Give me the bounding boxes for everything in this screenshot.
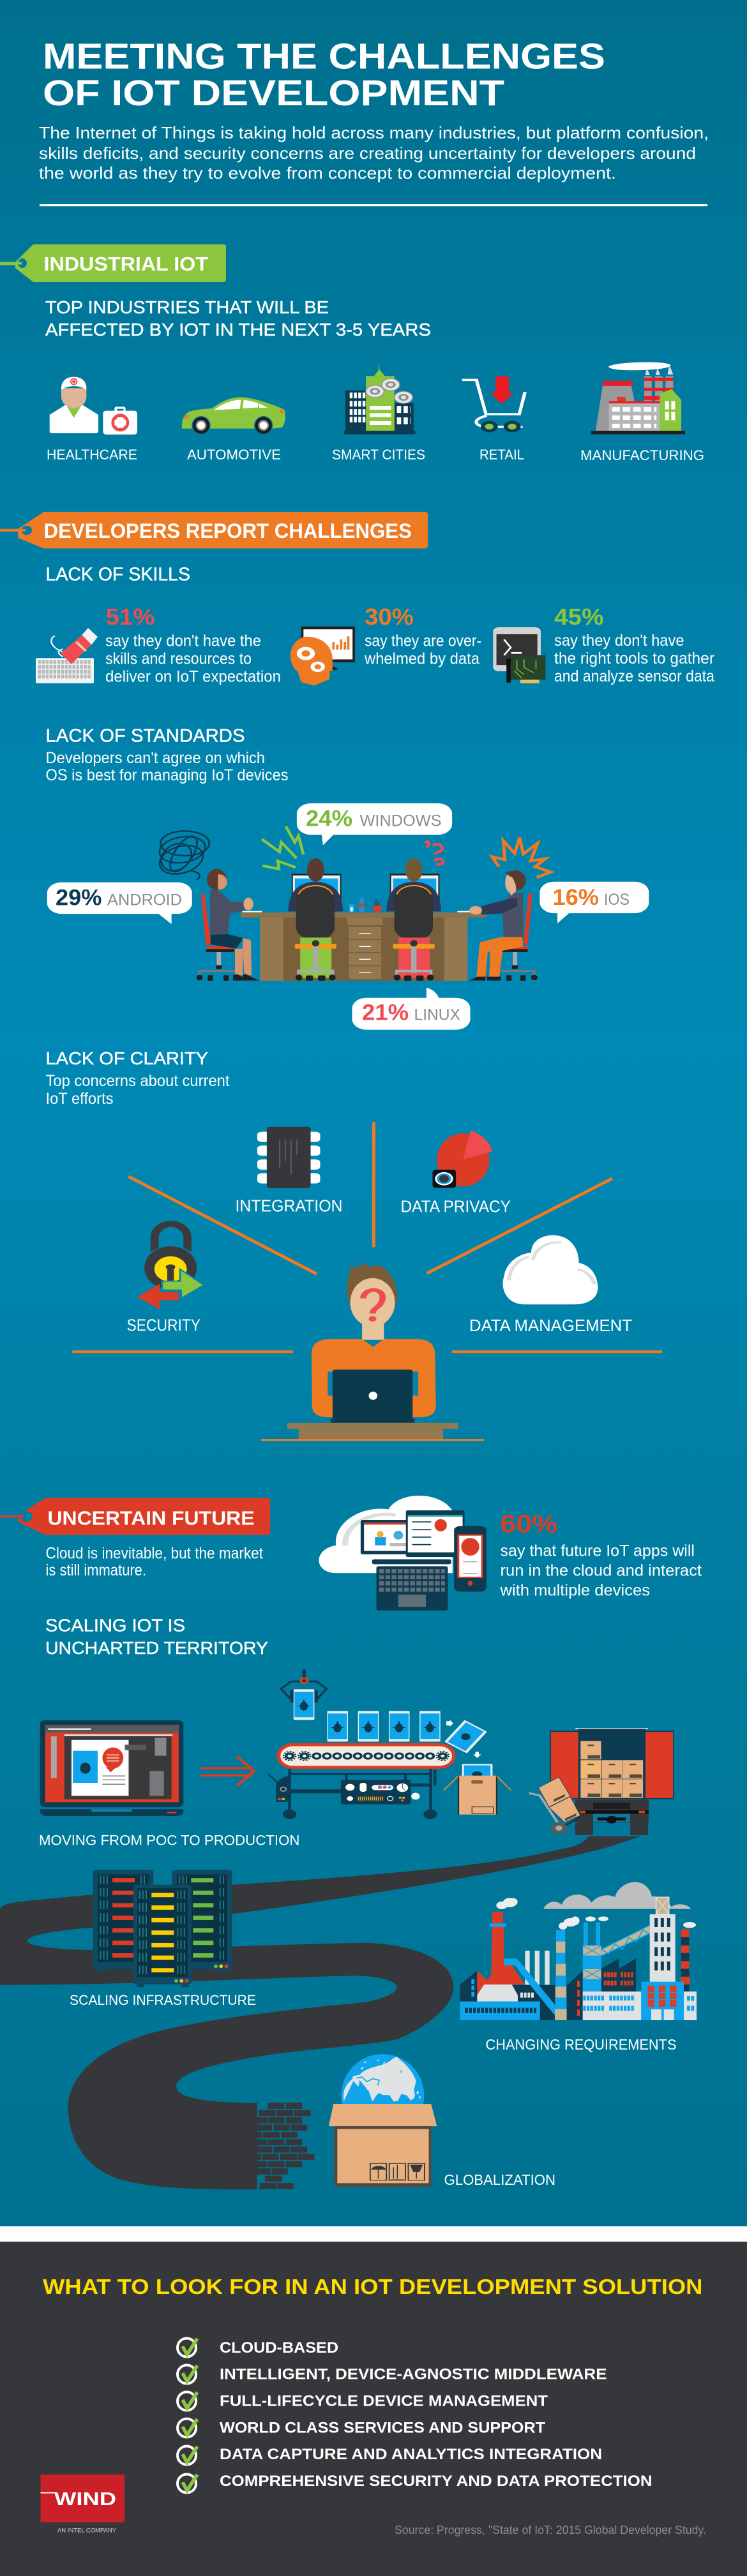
- callout: ios 16 percent: IOS: [604, 891, 630, 909]
- callout: android 29 percent: [47, 882, 192, 924]
- stat: 51 percent: say they don't have the: [105, 632, 261, 650]
- checklist: [177, 2338, 653, 2492]
- icon: integration chip: [257, 1127, 320, 1188]
- callout: ios 16 percent: [540, 882, 649, 923]
- icon: security lock: [137, 1221, 204, 1309]
- stat: 45 percent: say they don't have: [554, 632, 684, 650]
- callout: linux 21 percent: 21%: [362, 1001, 409, 1025]
- label: data privacy: DATA PRIVACY: [401, 1198, 511, 1216]
- text: lack of standards: Developers can't agree on which: [46, 749, 265, 767]
- stat: 45 percent: 45%: [554, 604, 604, 630]
- stat: 30 percent: 30%: [365, 604, 414, 630]
- label: globalization: GLOBALIZATION: [444, 2171, 555, 2188]
- heading: scaling iot: [45, 1616, 268, 1658]
- heading: what to look for: WHAT TO LOOK FOR IN AN IOT DEVELOPMENT SOLUTION: [43, 2275, 702, 2298]
- illustration: developers at desk: [155, 826, 550, 981]
- question marks: [425, 842, 443, 865]
- labels: industries: AUTOMOTIVE: [187, 447, 281, 463]
- winding road: [0, 1836, 641, 2189]
- intro text: The Internet of Things is taking hold across many industries, but platform confusion,: [39, 123, 709, 142]
- icon: poc laptop: [40, 1720, 183, 1816]
- heading: top industries: AFFECTED BY IOT IN THE NEXT 3-5 YEARS: [45, 320, 431, 339]
- heading: scaling iot: UNCHARTED TERRITORY: [45, 1638, 268, 1658]
- tag: industrial iot: [0, 244, 226, 282]
- stat: 30 percent: whelmed by data: [364, 650, 479, 667]
- check item: cloud-based: CLOUD-BASED: [220, 2339, 338, 2356]
- burst: [492, 838, 550, 877]
- icon: head with gears and chart: [290, 627, 355, 686]
- illustration: confused developer: [261, 1262, 484, 1441]
- callout: android 29 percent: 29%: [56, 886, 102, 910]
- text: cloud is inevitable: is still immature.: [46, 1561, 146, 1579]
- heading: scaling iot: SCALING IOT IS: [45, 1616, 185, 1635]
- icon: healthcare: [50, 377, 137, 435]
- logo: wind: [41, 2475, 124, 2534]
- label: changing requirements: CHANGING REQUIREMENTS: [485, 2036, 677, 2053]
- check item: analytics: DATA CAPTURE AND ANALYTICS INTEGRATION: [220, 2446, 602, 2463]
- truck: [550, 1728, 674, 1835]
- text: lack of standards: [46, 749, 289, 784]
- machine frame: [268, 1769, 437, 1819]
- labels: industries: MANUFACTURING: [580, 447, 704, 463]
- illustration: factory: [460, 1882, 697, 2020]
- text: cloud is inevitable: [46, 1544, 263, 1579]
- text: lack of clarity: [46, 1072, 230, 1108]
- panel: industrial iot: [0, 244, 704, 463]
- label: integration: INTEGRATION: [235, 1197, 342, 1215]
- person: windows developer: [288, 858, 343, 981]
- stat: 45 percent: and analyze sensor data: [554, 667, 714, 685]
- callout: windows 24 percent: 24%: [306, 807, 352, 831]
- icon: manufacturing: [591, 362, 685, 434]
- panel: what to look for: [0, 2242, 747, 2576]
- tag: developers report challenges: [0, 512, 428, 549]
- source note: Source: Progress, "State of IoT: 2015 Global Developer Study.: [395, 2524, 706, 2536]
- callout: android 29 percent: ANDROID: [107, 891, 182, 909]
- conveyor belt: [276, 1743, 455, 1769]
- intro text: [39, 123, 709, 182]
- title: OF IOT DEVELOPMENT: [43, 73, 504, 114]
- title: MEETING THE CHALLENGES: [43, 36, 605, 77]
- stat: 30 percent: [364, 604, 481, 667]
- heading: lack of skills: LACK OF SKILLS: [46, 564, 190, 584]
- panel: developers report challenges: [0, 512, 714, 1441]
- intro text: skills deficits, and security concerns are creating uncertainty for developers around: [39, 144, 696, 163]
- callout: windows 24 percent: WINDOWS: [360, 812, 442, 830]
- person: linux developer: [386, 858, 441, 981]
- icon: automotive: [182, 397, 285, 435]
- labels: industries: [47, 447, 704, 463]
- stat: 51 percent: deliver on IoT expectation: [105, 667, 281, 685]
- scribble: [155, 831, 209, 879]
- icon: globe in box: [329, 2054, 437, 2187]
- stat: 60 percent: say that future IoT apps will: [501, 1542, 695, 1560]
- title: [43, 36, 605, 114]
- tag text: UNCERTAIN FUTURE: [47, 1507, 254, 1529]
- person: ios developer: [469, 870, 538, 981]
- illustration: conveyor line: [268, 1670, 674, 1835]
- icon: smart cities: [344, 361, 416, 434]
- icon: data privacy pie: [433, 1130, 492, 1188]
- stat: 60 percent: 60%: [501, 1510, 557, 1538]
- callout: ios 16 percent: 16%: [553, 885, 599, 910]
- stat: 45 percent: [554, 604, 714, 685]
- white band: [0, 2226, 747, 2242]
- heading: top industries: [45, 297, 431, 339]
- stat: 30 percent: say they are over-: [365, 632, 481, 650]
- text: lack of clarity: IoT efforts: [46, 1090, 114, 1108]
- label: data management: DATA MANAGEMENT: [469, 1317, 632, 1335]
- tablets on belt: [327, 1711, 487, 1758]
- tag text: DEVELOPERS REPORT CHALLENGES: [43, 519, 412, 542]
- stat: 60 percent: run in the cloud and interact: [501, 1562, 702, 1580]
- check item: security: COMPREHENSIVE SECURITY AND DATA PROTECTION: [220, 2473, 653, 2490]
- stat: 51 percent: skills and resources to: [105, 650, 252, 667]
- person: android developer: [197, 869, 259, 981]
- icon: data management cloud: [503, 1235, 598, 1304]
- callout: linux 21 percent: [352, 988, 470, 1030]
- tag: industrial iot: INDUSTRIAL IOT: [43, 253, 208, 275]
- tag: uncertain future: [0, 1498, 270, 1535]
- arrow: poc to production: [200, 1756, 254, 1786]
- icon: terminal and circuit board: [493, 627, 545, 683]
- icon: server racks: [93, 1870, 232, 1987]
- stat: 60 percent: with multiple devices: [499, 1581, 650, 1599]
- icon: usb and keyboard: [36, 628, 98, 683]
- intro text: the world as they try to evolve from concept to commercial deployment.: [39, 163, 616, 182]
- lightning bolts: [262, 826, 303, 869]
- check item: cloud-based: [177, 2338, 338, 2357]
- robot arm: [281, 1670, 327, 1720]
- desk: [241, 911, 486, 981]
- stat: 45 percent: the right tools to gather: [554, 650, 714, 667]
- callout: windows 24 percent: [297, 803, 452, 845]
- label: scaling infrastructure: SCALING INFRASTRUCTURE: [70, 1992, 256, 2008]
- stat: 51 percent: [105, 604, 281, 685]
- check item: middleware: INTELLIGENT, DEVICE-AGNOSTIC MIDDLEWARE: [220, 2366, 607, 2383]
- packing box: [444, 1764, 511, 1815]
- labels: industries: SMART CITIES: [332, 447, 425, 463]
- logo: wind: AN INTEL COMPANY: [57, 2527, 117, 2534]
- radiating lines: [72, 1122, 662, 1351]
- stat: 60 percent: [499, 1510, 702, 1599]
- control panel: [345, 1783, 420, 1801]
- text: lack of standards: OS is best for managing IoT devices: [46, 766, 289, 784]
- callout: linux 21 percent: LINUX: [414, 1006, 460, 1024]
- heading: lack of standards: LACK OF STANDARDS: [46, 726, 245, 747]
- heading: lack of clarity: LACK OF CLARITY: [46, 1048, 208, 1068]
- icon: retail: [462, 376, 525, 432]
- desk items: [349, 897, 382, 912]
- text: cloud is inevitable: Cloud is inevitable, but the market: [46, 1544, 263, 1562]
- check item: device management: FULL-LIFECYCLE DEVICE MANAGEMENT: [220, 2393, 548, 2409]
- heading: top industries: TOP INDUSTRIES THAT WILL BE: [45, 297, 329, 317]
- label: security: SECURITY: [126, 1317, 200, 1335]
- check item: services and support: WORLD CLASS SERVICES AND SUPPORT: [220, 2420, 545, 2436]
- labels: industries: RETAIL: [479, 447, 524, 463]
- text: lack of clarity: Top concerns about current: [46, 1072, 230, 1090]
- icon: brick wall: [253, 2103, 314, 2189]
- labels: industries: HEALTHCARE: [47, 447, 137, 463]
- logo: wind: WIND: [54, 2489, 116, 2510]
- stat: 51 percent: 51%: [106, 604, 155, 630]
- icon: cloud devices: [319, 1496, 487, 1611]
- label: moving from poc: MOVING FROM POC TO PRODUCTION: [39, 1833, 300, 1848]
- hand truck with boxes: [529, 1777, 583, 1834]
- panel: uncertain future: [0, 1496, 702, 2189]
